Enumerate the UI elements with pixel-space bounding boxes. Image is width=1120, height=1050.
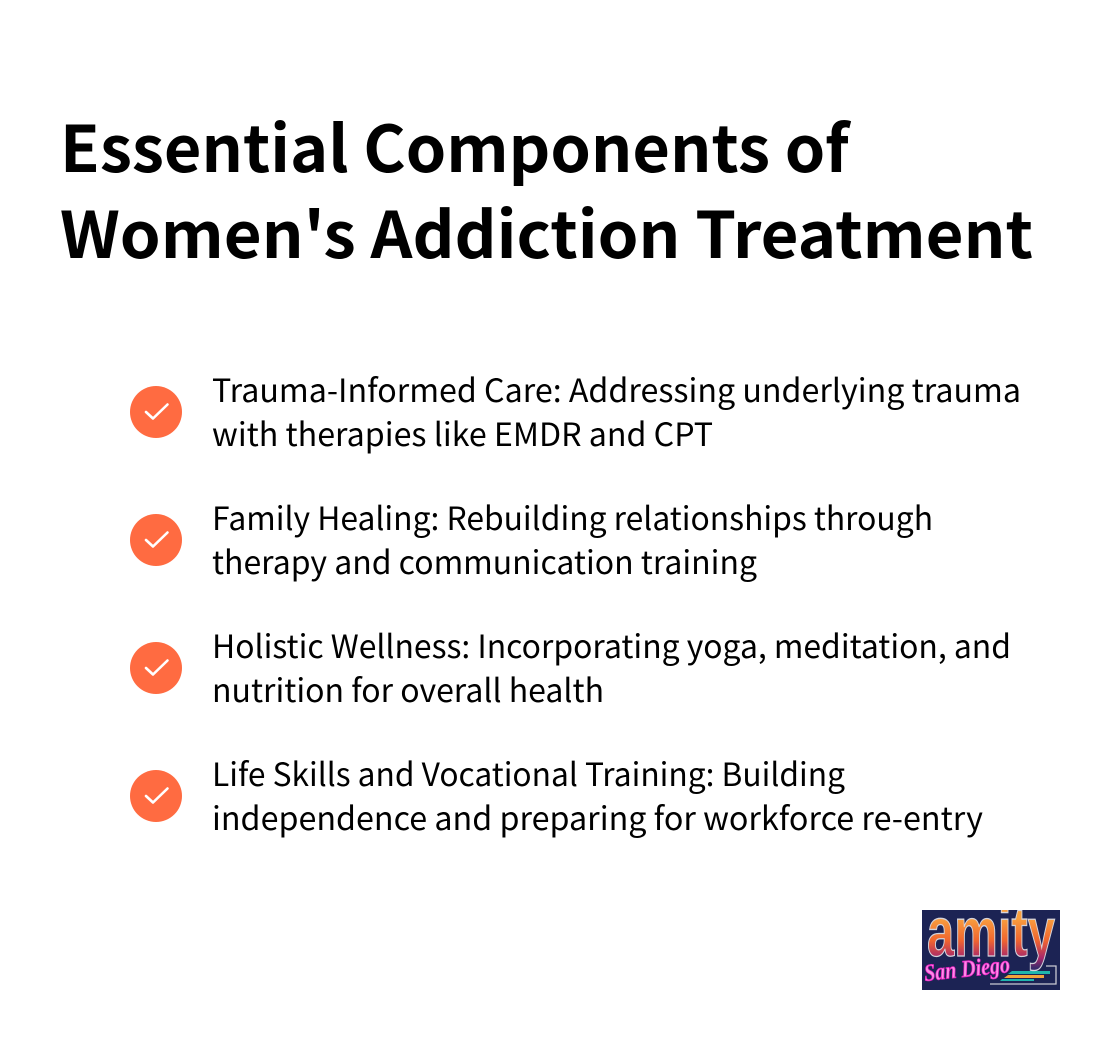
icon: check circle (130, 770, 182, 822)
icon: check circle (130, 386, 182, 438)
logo: Amity San Diego: amity (927, 893, 1055, 971)
title: Essential Components of (60, 99, 851, 191)
text: life skills and vocational training: independence and preparing for workforce re-entry (212, 794, 983, 840)
text: holistic wellness: nutrition for overall health (212, 666, 604, 712)
text: family healing: Family Healing: Rebuilding relationships through (212, 494, 933, 540)
item: holistic wellness (130, 622, 1011, 712)
text: holistic wellness (212, 622, 1011, 712)
icon: check circle (130, 642, 182, 694)
logo: Amity San Diego: San Diego (923, 952, 1011, 987)
text: life skills and vocational training: Life Skills and Vocational Training: Building (212, 750, 845, 796)
item: trauma-informed care (130, 366, 1021, 456)
text: trauma-informed care: with therapies like EMDR and CPT (212, 410, 713, 456)
text: trauma-informed care: Trauma-Informed Care: Addressing underlying trauma (212, 366, 1021, 412)
logo: Amity San Diego (922, 910, 1060, 990)
text: holistic wellness: Holistic Wellness: Incorporating yoga, meditation, and (212, 622, 1011, 668)
text: trauma-informed care (212, 366, 1021, 456)
item: family healing (130, 494, 933, 584)
text: family healing: therapy and communication training (212, 538, 757, 584)
icon: check circle (130, 514, 182, 566)
text: life skills and vocational training (212, 750, 983, 840)
text: family healing (212, 494, 933, 584)
checklist (130, 366, 1021, 840)
item: life skills and vocational training (130, 750, 983, 840)
title: Women's Addiction Treatment (60, 185, 1033, 277)
title (60, 99, 1033, 277)
